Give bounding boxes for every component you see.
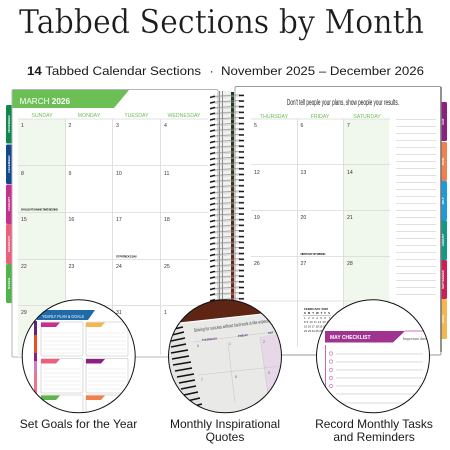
date numbers: 8 — [21, 171, 24, 177]
check circles — [329, 352, 333, 388]
date numbers: 21 — [347, 215, 353, 221]
holiday note: FIRST DAY OF SPRING — [300, 252, 326, 256]
date numbers: 19 — [254, 215, 260, 221]
date numbers: 6 — [300, 123, 304, 129]
tab: March: MARCH — [7, 278, 11, 289]
date numbers: 8 — [235, 375, 237, 379]
date numbers: 25 — [164, 264, 170, 270]
date numbers: 23 — [68, 264, 74, 270]
tab: May — [438, 102, 447, 141]
date numbers: 22 — [21, 264, 27, 270]
tab: September: SEPTEMBER — [441, 269, 445, 289]
date numbers — [197, 340, 270, 382]
mini calendar: February: 1 2 3 4 5 6 7 — [304, 316, 330, 320]
notes lines — [396, 120, 436, 294]
weekday labels: FRIDAY — [238, 333, 248, 338]
tab: July — [438, 181, 447, 220]
box lines — [43, 333, 126, 389]
tab: December: DECEMBER — [7, 155, 11, 173]
weekday labels: TUESDAY — [124, 113, 149, 119]
Saturday column — [260, 334, 281, 393]
checklist banner: MAY CHECKLIST — [330, 335, 371, 341]
caption: quotes: Monthly Inspirational — [170, 417, 280, 431]
weekday labels — [202, 332, 274, 341]
date numbers: 2 — [68, 123, 72, 129]
panel: goals magnifier — [22, 302, 135, 412]
date numbers: 2 — [263, 340, 265, 344]
tab: February: FEBRUARY — [7, 236, 11, 252]
right tabs — [438, 102, 447, 339]
date numbers — [21, 123, 170, 316]
date numbers: 16 — [68, 217, 74, 223]
quote in page: Striving for success without hard work is like expecting — [193, 318, 273, 334]
mini calendar: February: 15 16 17 18 19 20 21 — [304, 324, 330, 328]
date numbers: 1 — [21, 123, 24, 129]
date numbers: 10 — [116, 171, 122, 177]
tab: April — [438, 299, 447, 339]
date numbers: 18 — [164, 217, 170, 223]
side note: Important dates, re — [403, 336, 433, 342]
caption: checklist: and Reminders — [333, 430, 415, 444]
quotes magnifier ring — [168, 300, 282, 413]
tab: January: JANUARY — [7, 197, 11, 211]
left tabs — [6, 105, 14, 303]
caption: checklist: Record Monthly Tasks — [315, 417, 433, 431]
tab: January — [6, 184, 14, 224]
month header banner: MARCH 2026 — [20, 97, 70, 106]
tab: June — [438, 142, 447, 181]
date numbers: 24 — [116, 264, 122, 270]
date numbers: 29 — [21, 310, 27, 316]
yearly plan banner: YEARLY PLAN & GOALS — [42, 314, 84, 319]
weekday labels: MONDAY — [78, 113, 101, 119]
subtitle: 14 Tabbed Calendar Sections — [27, 64, 201, 78]
mini calendar: February: FEBRUARY 2026 — [304, 307, 328, 311]
date numbers: 1 — [229, 342, 231, 346]
holiday notes: ST PATRICK'S DAY — [116, 254, 137, 258]
tab: August: AUGUST — [441, 234, 445, 246]
goal boxes — [40, 322, 128, 412]
check lines — [336, 354, 423, 403]
date numbers: 26 — [254, 261, 260, 267]
weekday labels: SATURDAY — [353, 114, 381, 120]
weekday labels: SUNDAY — [31, 113, 53, 119]
tab: May: MAY — [441, 118, 445, 125]
panel: right calendar page — [235, 86, 441, 355]
panel: quotes magnifier — [169, 300, 281, 412]
date numbers: 20 — [300, 215, 306, 221]
weekday labels — [260, 114, 381, 120]
weekday labels: THURSDAY — [202, 336, 217, 342]
date numbers: 1 — [164, 310, 167, 316]
tab: February — [6, 224, 14, 264]
tab: December — [6, 144, 14, 184]
mini calendar: February — [303, 307, 331, 333]
weekday labels: THURSDAY — [260, 114, 289, 120]
date numbers: 9 — [268, 371, 270, 375]
goals magnifier ring — [22, 300, 135, 413]
subtitle: · — [210, 64, 214, 78]
date numbers: 31 — [116, 310, 122, 316]
date numbers: 7 — [201, 378, 203, 382]
subtitle — [27, 64, 424, 78]
checklist outline — [325, 330, 424, 386]
date numbers: 12 — [254, 170, 260, 176]
tab: April: APRIL — [441, 314, 445, 324]
mini calendar: February: 22 23 24 25 26 27 28 — [304, 329, 330, 333]
date numbers: 9 — [68, 171, 72, 177]
date numbers: 5 — [197, 344, 199, 348]
date numbers: 4 — [164, 123, 167, 129]
tilted grid — [193, 331, 282, 407]
weekday labels — [31, 113, 201, 119]
tab: July: JULY — [441, 197, 445, 205]
spiral coils — [171, 327, 202, 407]
weekday labels: SAT — [268, 330, 274, 335]
caption: goals: Set Goals for the Year — [20, 417, 137, 431]
weekday labels: FRIDAY — [311, 114, 330, 120]
Saturday column shading — [344, 119, 390, 349]
tilted planner page — [180, 311, 290, 420]
date numbers: 11 — [164, 171, 169, 177]
tab: September — [438, 260, 447, 299]
checklist magnifier ring — [316, 300, 430, 413]
Sunday column shading — [18, 119, 66, 357]
colored side tabs — [34, 321, 37, 394]
date numbers: 13 — [300, 170, 306, 176]
date numbers: 3 — [116, 123, 119, 129]
holiday notes: DAYLIGHT SAVING TIME BEGINS — [21, 208, 58, 212]
mini calendar: February: S M T W T F S — [304, 311, 330, 315]
date numbers: 14 — [347, 170, 353, 176]
month header banner — [12, 90, 129, 108]
date numbers: 15 — [21, 217, 27, 223]
date numbers: 27 — [300, 261, 306, 267]
month labels — [41, 322, 105, 400]
subtitle: November 2025 – December 2026 — [221, 64, 424, 78]
tab: August — [438, 220, 447, 260]
panel: left calendar page — [12, 90, 218, 357]
spiral binding — [210, 91, 245, 313]
panel: checklist magnifier — [317, 300, 429, 404]
tab: November — [6, 105, 14, 144]
caption: quotes: Quotes — [206, 430, 244, 444]
tab: March — [6, 264, 14, 303]
date numbers: 28 — [347, 261, 353, 267]
tab: November: NOVEMBER — [7, 115, 11, 133]
date numbers: 7 — [347, 123, 350, 129]
date numbers — [254, 123, 353, 267]
holiday notes — [21, 208, 137, 258]
page top edge — [180, 314, 262, 324]
tab: June: JUNE — [441, 157, 445, 166]
wood background — [180, 300, 262, 322]
mini calendar: February: 8 9 10 11 12 13 14 — [304, 320, 330, 324]
date numbers: 17 — [116, 217, 122, 223]
weekday labels: WEDNESDAY — [167, 113, 201, 119]
date numbers: 5 — [254, 123, 257, 129]
